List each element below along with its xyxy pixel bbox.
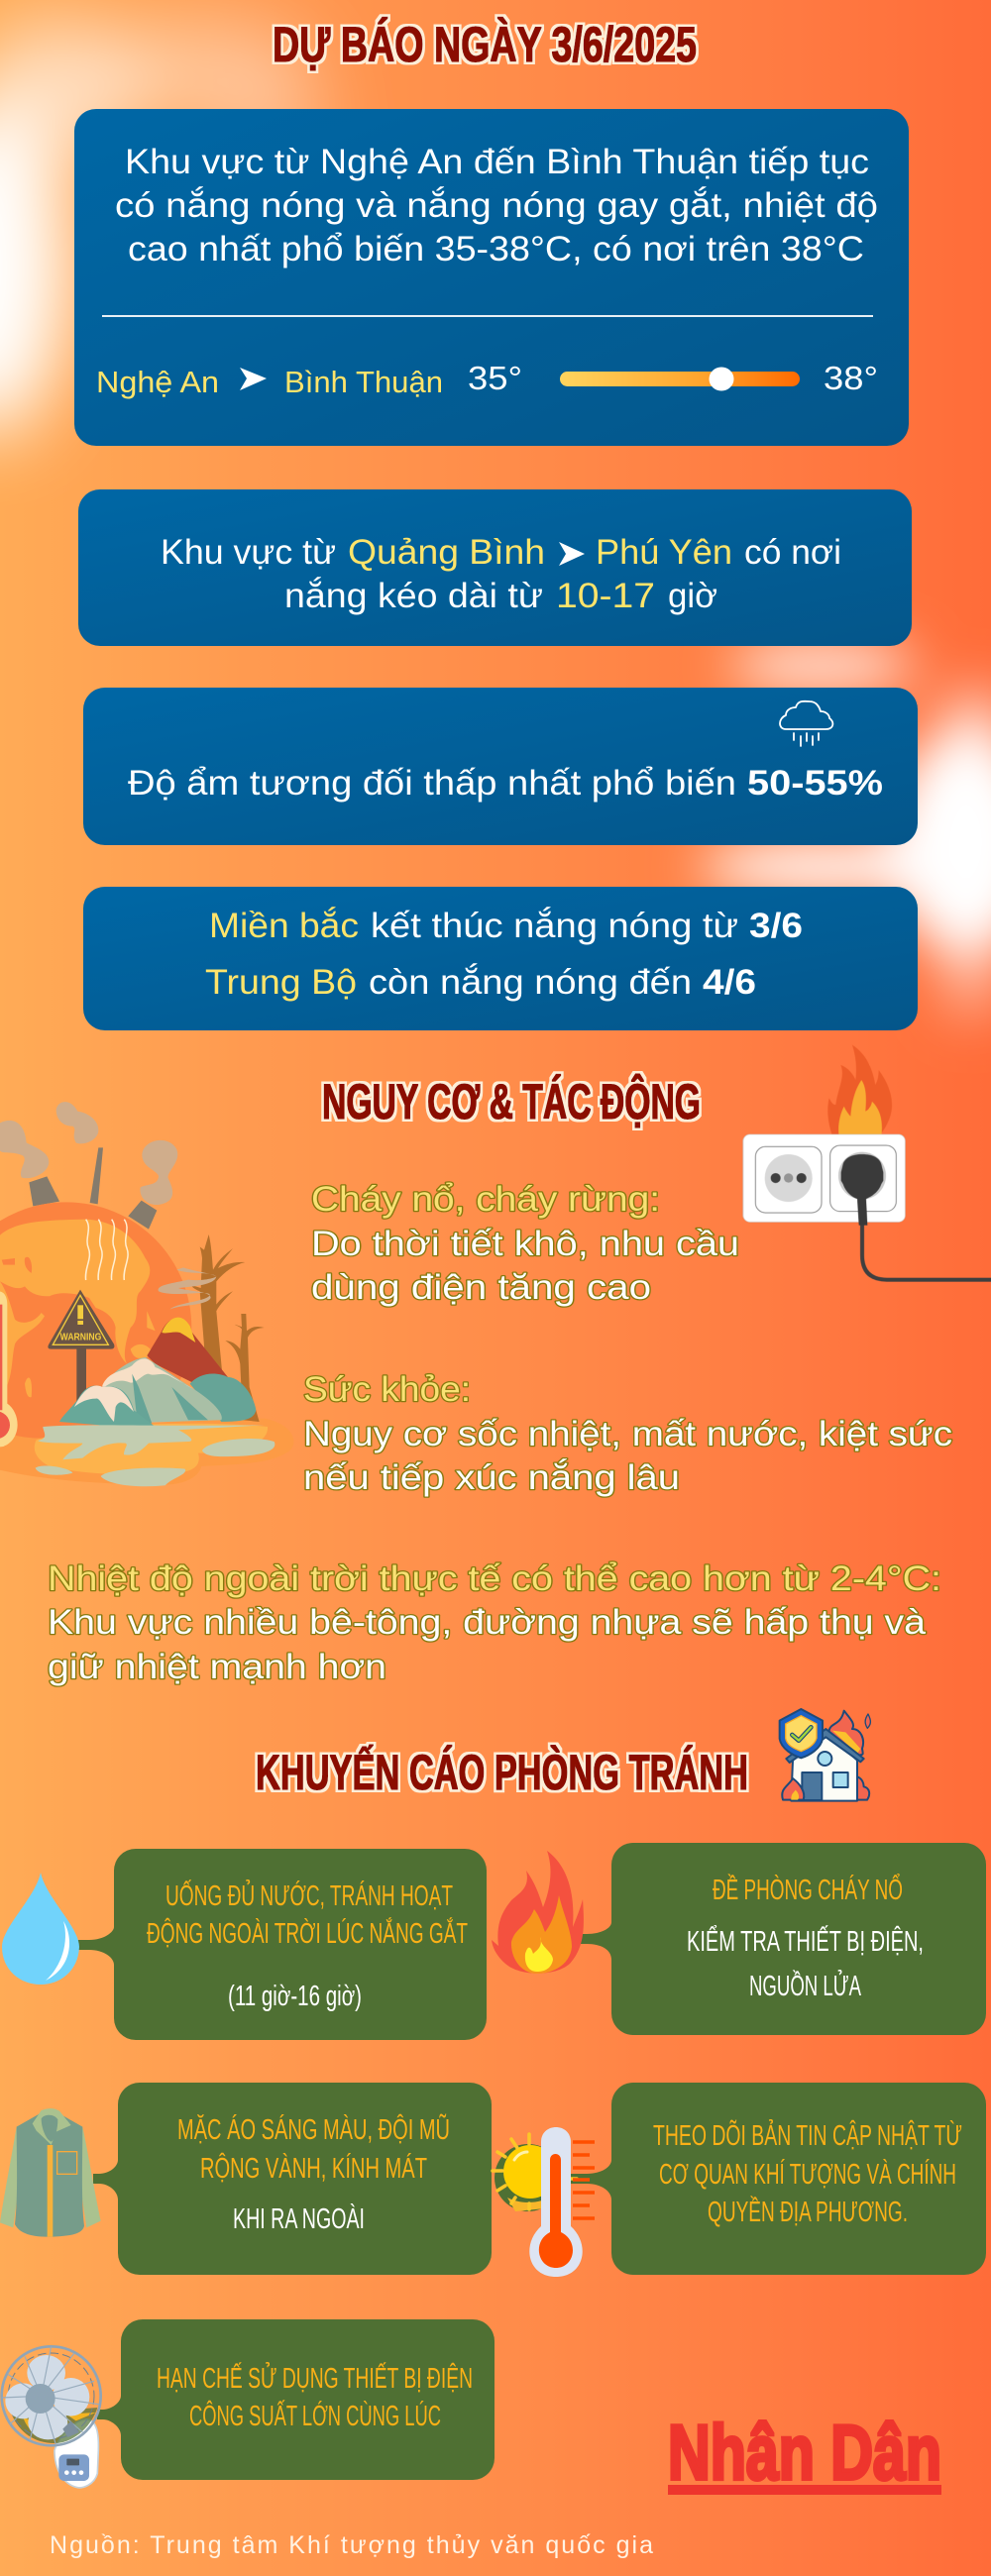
card: hydrate: (11 giờ-16 giờ) bbox=[228, 1981, 362, 2012]
card: clothing: RỘNG VÀNH, KÍNH MÁT bbox=[200, 2151, 427, 2185]
card: fire prevention bbox=[579, 1843, 986, 2035]
smoke bbox=[0, 1102, 177, 1205]
heading: risks and impacts: NGUY CƠ & TÁC ĐỘNG bbox=[322, 1073, 701, 1129]
icon: burning socket bbox=[743, 1045, 991, 1280]
puddles bbox=[36, 1425, 275, 1486]
region range: Bình Thuận bbox=[284, 365, 443, 399]
card: power use: CÔNG SUẤT LỚN CÙNG LÚC bbox=[189, 2399, 441, 2432]
text block: health: nếu tiếp xúc nắng lâu bbox=[303, 1458, 680, 1497]
volcano smoke bbox=[159, 1267, 216, 1310]
card: hydrate bbox=[75, 1849, 487, 2040]
text block: outdoor temperature: Nhiệt độ ngoài trời thực tế có thể cao hơn từ 2-4°C: bbox=[48, 1559, 941, 1598]
text block: health: Sức khỏe: bbox=[303, 1370, 471, 1409]
panel: sunshine duration: 10-17 bbox=[556, 577, 655, 615]
region range: Nghệ An bbox=[96, 365, 219, 399]
panel: heat end dates: 4/6 bbox=[703, 963, 756, 1002]
text block: health bbox=[303, 1370, 952, 1497]
text block: fire risk: dùng điện tăng cao bbox=[311, 1268, 651, 1307]
panel: humidity bbox=[83, 688, 918, 845]
card: clothing: MẶC ÁO SÁNG MÀU, ĐỘI MŨ bbox=[177, 2112, 450, 2146]
card: follow bulletins bbox=[565, 2083, 986, 2275]
mountains bbox=[190, 1374, 256, 1422]
panel: humidity: Độ ẩm tương đối thấp nhất phổ biến bbox=[128, 764, 736, 803]
card: fire prevention: NGUỒN LỬA bbox=[749, 1969, 861, 2002]
temperature slider: 35° bbox=[468, 360, 522, 396]
icon: flame bbox=[492, 1851, 584, 1974]
card: clothing bbox=[93, 2083, 492, 2275]
panel: heat end dates: kết thúc nắng nóng từ bbox=[371, 907, 738, 945]
forecast text: cao nhất phổ biến 35-38°C, có nơi trên 38°C bbox=[128, 230, 864, 268]
warning sign bbox=[48, 1290, 114, 1402]
panel: sunshine duration: Phú Yên bbox=[596, 533, 732, 572]
warning sign: WARNING bbox=[60, 1332, 102, 1342]
illustration: global warming bbox=[0, 1102, 293, 1486]
panel: sunshine duration: có nơi bbox=[744, 533, 841, 572]
text block: fire risk: Do thời tiết khô, nhu cầu bbox=[311, 1225, 739, 1263]
icon: rain cloud bbox=[780, 701, 832, 746]
panel: heat forecast bbox=[74, 109, 909, 446]
heading: recommendations: KHUYẾN CÁO PHÒNG TRÁNH bbox=[256, 1745, 748, 1800]
panel: humidity: 50-55% bbox=[747, 764, 883, 803]
panel: sunshine duration bbox=[78, 489, 912, 646]
background clouds bbox=[0, 20, 991, 1020]
forecast text bbox=[115, 143, 878, 268]
forecast text: có nắng nóng và nắng nóng gay gắt, nhiệt độ bbox=[115, 186, 878, 225]
temperature slider bbox=[468, 360, 878, 396]
panel: heat end dates bbox=[83, 887, 918, 1030]
panel: heat end dates: còn nắng nóng đến bbox=[369, 963, 692, 1002]
panel: heat end dates: 3/6 bbox=[749, 907, 803, 945]
icon: house on fire with shield bbox=[780, 1709, 870, 1801]
ground glow bbox=[0, 1419, 293, 1485]
region range bbox=[96, 365, 443, 399]
panel: sunshine duration: Khu vực từ bbox=[161, 533, 336, 572]
icon: electric fan bbox=[2, 2346, 101, 2488]
icon: shirt bbox=[0, 2108, 101, 2237]
panel: heat end dates: Miền bắc bbox=[209, 907, 359, 945]
card: clothing: KHI RA NGOÀI bbox=[233, 2202, 365, 2235]
forecast text: Khu vực từ Nghệ An đến Bình Thuận tiếp tục bbox=[125, 143, 869, 181]
panel: sunshine duration: nắng kéo dài từ bbox=[284, 577, 543, 615]
trees bbox=[190, 1234, 265, 1422]
volcano bbox=[147, 1319, 228, 1384]
text block: outdoor temperature: Khu vực nhiều bê-tông, đường nhựa sẽ hấp thụ và bbox=[48, 1603, 927, 1642]
source note: Nguồn: Trung tâm Khí tượng thủy văn quốc gia bbox=[50, 2531, 653, 2559]
card: power use bbox=[97, 2319, 495, 2480]
panel: heat end dates: Trung Bộ bbox=[205, 963, 357, 1002]
icon: water drop bbox=[2, 1873, 79, 1985]
card: power use: HẠN CHẾ SỬ DỤNG THIẾT BỊ ĐIỆN bbox=[157, 2361, 473, 2395]
temperature slider: 38° bbox=[824, 360, 878, 396]
text block: health: Nguy cơ sốc nhiệt, mất nước, kiệt sức bbox=[303, 1415, 952, 1453]
text block: fire risk: Cháy nổ, cháy rừng: bbox=[311, 1180, 660, 1219]
panel: sunshine duration: giờ bbox=[668, 577, 717, 615]
text block: outdoor temperature bbox=[48, 1559, 941, 1686]
text block: outdoor temperature: giữ nhiệt mạnh hơn bbox=[48, 1648, 386, 1686]
card: hydrate: UỐNG ĐỦ NƯỚC, TRÁNH HOẠT bbox=[165, 1878, 453, 1912]
globe bbox=[0, 1202, 191, 1453]
text block: fire risk bbox=[311, 1180, 739, 1307]
card: hydrate: ĐỘNG NGOÀI TRỜI LÚC NẮNG GẮT bbox=[147, 1916, 468, 1950]
panel: sunshine duration: Quảng Bình bbox=[348, 533, 545, 572]
thermometer bbox=[0, 1291, 18, 1448]
heat waves bbox=[85, 1220, 128, 1280]
chimneys bbox=[29, 1147, 157, 1230]
icon: sun and thermometer bbox=[493, 2127, 595, 2277]
title: DỰ BÁO NGÀY 3/6/2025 bbox=[273, 17, 697, 72]
